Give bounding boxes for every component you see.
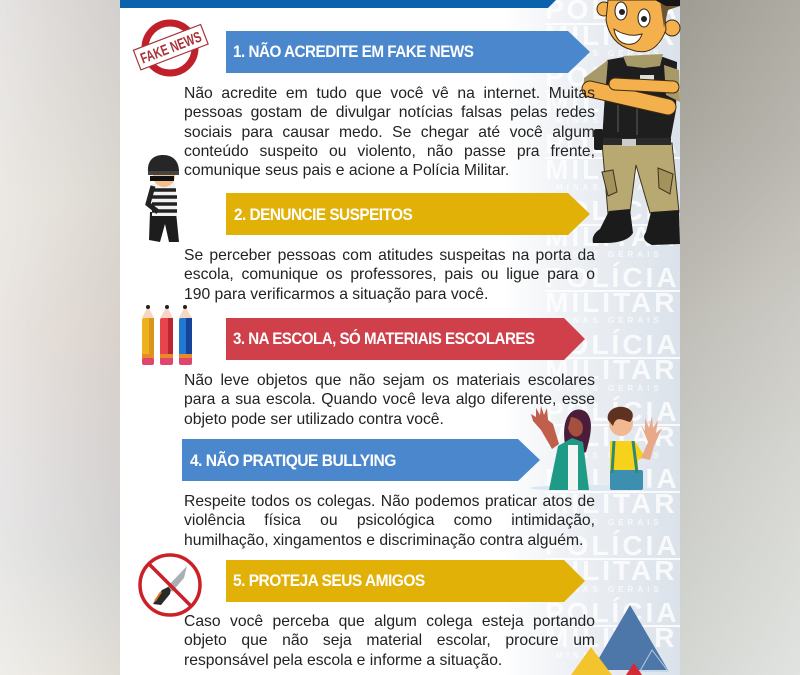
panel: infographic sheet with watermark: MINAS GERAIS <box>556 651 663 660</box>
panel: infographic sheet with watermark: MINAS GERAIS <box>556 585 663 594</box>
panel: infographic sheet with watermark: MILITAR <box>545 20 677 51</box>
icon: fake news stamp: FAKE NEWS <box>138 29 204 68</box>
badge <box>640 75 654 81</box>
panel: infographic sheet with watermark: MINAS GERAIS <box>556 183 663 192</box>
heading 3: 3. NA ESCOLA, SÓ MATERIAIS ESCOLARES <box>233 330 534 348</box>
text block 2 <box>184 247 595 302</box>
text block 4: humilhação, xingamentos e discriminação contra alguém. <box>184 532 583 548</box>
panel: infographic sheet with watermark: MILITAR <box>545 421 677 452</box>
text block 4: violência física ou psicológica como intimidação, <box>184 512 595 529</box>
head <box>606 0 666 52</box>
text block 1: comunique seus pais e acione a Polícia Militar. <box>184 162 509 179</box>
sleeves <box>583 60 608 92</box>
text block 5: objeto que não seja material escolar, procure um <box>184 632 595 649</box>
text block 3 <box>184 372 595 428</box>
smile <box>614 29 642 44</box>
panel: infographic sheet with watermark: POLÍCIA <box>545 396 680 427</box>
heading bar 3 <box>226 318 585 360</box>
panel: infographic sheet with watermark: POLÍCIA <box>545 128 680 159</box>
top blue banner <box>120 0 556 8</box>
panel: infographic sheet with watermark: MINAS GERAIS <box>556 316 663 325</box>
text block 1 <box>184 85 595 179</box>
panel: infographic sheet with watermark <box>120 0 680 675</box>
girl <box>531 406 591 490</box>
heading bar 2 <box>226 193 590 235</box>
heading bar 1 <box>226 31 590 73</box>
belt <box>603 138 671 145</box>
icon: pencils <box>142 305 192 365</box>
vest <box>602 57 677 142</box>
panel: infographic sheet with watermark: POLÍCIA <box>545 262 680 293</box>
text block 5: Caso você perceba que algum colega esteja portando <box>184 613 595 630</box>
text block 3: para a sua escola. Quando você leva algo diferente, esse <box>184 391 595 408</box>
panel: infographic sheet with watermark: MINAS GERAIS <box>556 518 663 527</box>
panel: infographic sheet with watermark: MINAS GERAIS <box>556 49 663 58</box>
panel: infographic sheet with watermark: POLÍCIA <box>545 329 680 360</box>
panel: infographic sheet with watermark: POLÍCIA <box>545 463 680 494</box>
heading bar 4 <box>182 439 540 481</box>
text block 1: sociais para causar medo. Se chegar até você algum <box>184 124 595 140</box>
heading 2: 2. DENUNCIE SUSPEITOS <box>234 206 412 224</box>
panel: infographic sheet with watermark: MILITAR <box>545 488 677 519</box>
text block 4 <box>184 493 595 548</box>
icon: no knife sign <box>140 555 200 615</box>
text block 1: conteúdo suspeito ou violento, não passe pra frente, <box>184 143 595 160</box>
heading bar 5 <box>226 560 585 602</box>
icon: police officer mascot <box>583 0 680 245</box>
panel: infographic sheet with watermark: MILITAR <box>545 287 677 318</box>
text block 5 <box>184 613 595 668</box>
panel: infographic sheet with watermark: MILITAR <box>545 221 677 252</box>
cargo pockets <box>602 168 673 196</box>
text block 1: pessoas gostam de divulgar notícias falsas pelas redes <box>184 104 595 121</box>
text block 2: 190 para verificarmos a situação para você. <box>184 286 488 302</box>
eyes <box>615 2 627 20</box>
logo triangles <box>571 605 668 675</box>
text block 5: responsável pela escola e informe a situação. <box>184 652 502 668</box>
text block 4: Respeite todos os colegas. Não podemos praticar atos de <box>184 493 595 510</box>
heading 4: 4. NÃO PRATIQUE BULLYING <box>190 452 396 470</box>
heading 1: 1. NÃO ACREDITE EM FAKE NEWS <box>233 43 473 61</box>
text block 1: Não acredite em tudo que você vê na internet. Muitas <box>184 85 595 102</box>
legs <box>602 143 679 214</box>
ears <box>597 2 611 16</box>
blurred background left <box>0 0 120 675</box>
panel: infographic sheet with watermark: POLÍCIA <box>545 195 680 226</box>
blurred background left shade <box>0 0 120 675</box>
text block 2: Se perceber pessoas com atitudes suspeitas na porta da <box>184 247 595 264</box>
text block 3: Não leve objetos que não sejam os materiais escolares <box>184 372 595 389</box>
panel: infographic sheet with watermark: POLÍCIA <box>545 530 680 561</box>
panel: infographic sheet with watermark: MINAS GERAIS <box>556 250 663 259</box>
icon: children raising hands <box>530 406 662 491</box>
heading 5: 5. PROTEJA SEUS AMIGOS <box>233 572 425 590</box>
crossed arms <box>590 89 668 107</box>
panel: infographic sheet with watermark: MILITAR <box>545 87 677 118</box>
panel: infographic sheet with watermark: POLÍCIA <box>545 61 680 92</box>
text block 3: objeto pode ser utilizado contra você. <box>184 410 444 428</box>
panel: infographic sheet with watermark: MINAS GERAIS <box>556 451 663 460</box>
panel: infographic sheet with watermark: MILITAR <box>545 354 677 385</box>
panel: infographic sheet with watermark: MILITAR <box>545 555 677 586</box>
blurred background right shade <box>680 0 800 675</box>
icon: thief <box>148 155 179 242</box>
text block 2: escola, comunique os professores, pais ou ligue para o <box>184 266 595 283</box>
icon: fake news stamp <box>133 23 208 73</box>
panel: infographic sheet with watermark: MINAS GERAIS <box>556 384 663 393</box>
panel: infographic sheet with watermark: MILITAR <box>545 622 677 653</box>
panel: infographic sheet with watermark: MILITAR <box>545 154 677 185</box>
panel: infographic sheet with watermark: MINAS GERAIS <box>556 116 663 125</box>
collar <box>623 54 663 68</box>
blurred background right <box>680 0 800 675</box>
boots <box>593 209 633 243</box>
panel: infographic sheet with watermark: POLÍCIA <box>545 597 680 628</box>
boy <box>608 407 662 490</box>
